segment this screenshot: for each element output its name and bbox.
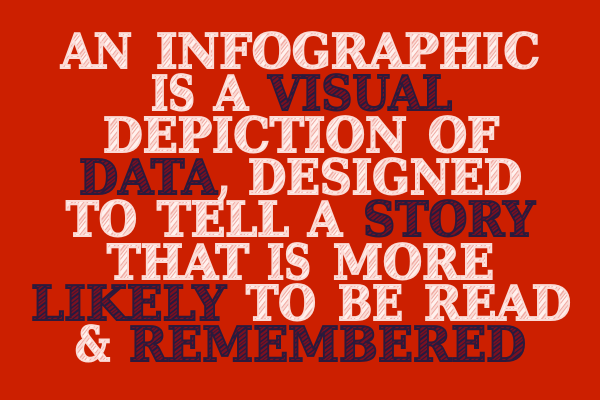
line 2: is a visual: A (213, 66, 249, 122)
line 3: depiction of: OF (428, 108, 499, 164)
line 6: that is more: MORE (333, 235, 494, 291)
line 7: likely to be read: LIKELY (31, 276, 227, 332)
line 6: that is more (107, 235, 494, 291)
line 5: to tell a story (66, 192, 536, 248)
line 4: data, designed: , (218, 150, 230, 206)
line 1: an infographic: AN (60, 24, 132, 80)
line 8: & remembered: & (75, 317, 110, 373)
line 6: that is more: IS (267, 235, 311, 291)
line 6: that is more: THAT (107, 235, 249, 291)
line 7: likely to be read: BE (338, 276, 403, 332)
line 5: to tell a story: TELL (157, 192, 289, 248)
line 7: likely to be read: READ (424, 276, 571, 332)
line 2: is a visual: IS (151, 66, 195, 122)
line 4: data, designed: DATA (79, 150, 218, 206)
line 7: likely to be read: TO (246, 276, 316, 332)
line 5: to tell a story: A (307, 192, 343, 248)
headline (31, 24, 571, 373)
line 4: data, designed: DESIGNED (248, 150, 522, 206)
line 1: an infographic: INFOGRAPHIC (156, 24, 540, 80)
line 7: likely to be read (31, 276, 571, 332)
line 2: is a visual (151, 66, 452, 122)
line 5: to tell a story: TO (66, 192, 137, 248)
line 2: is a visual: VISUAL (267, 66, 452, 122)
line 4: data, designed (79, 150, 522, 206)
line 8: & remembered: REMEMBERED (129, 317, 526, 373)
line 3: depiction of: DEPICTION (103, 108, 407, 164)
line 5: to tell a story: STORY (363, 192, 536, 248)
